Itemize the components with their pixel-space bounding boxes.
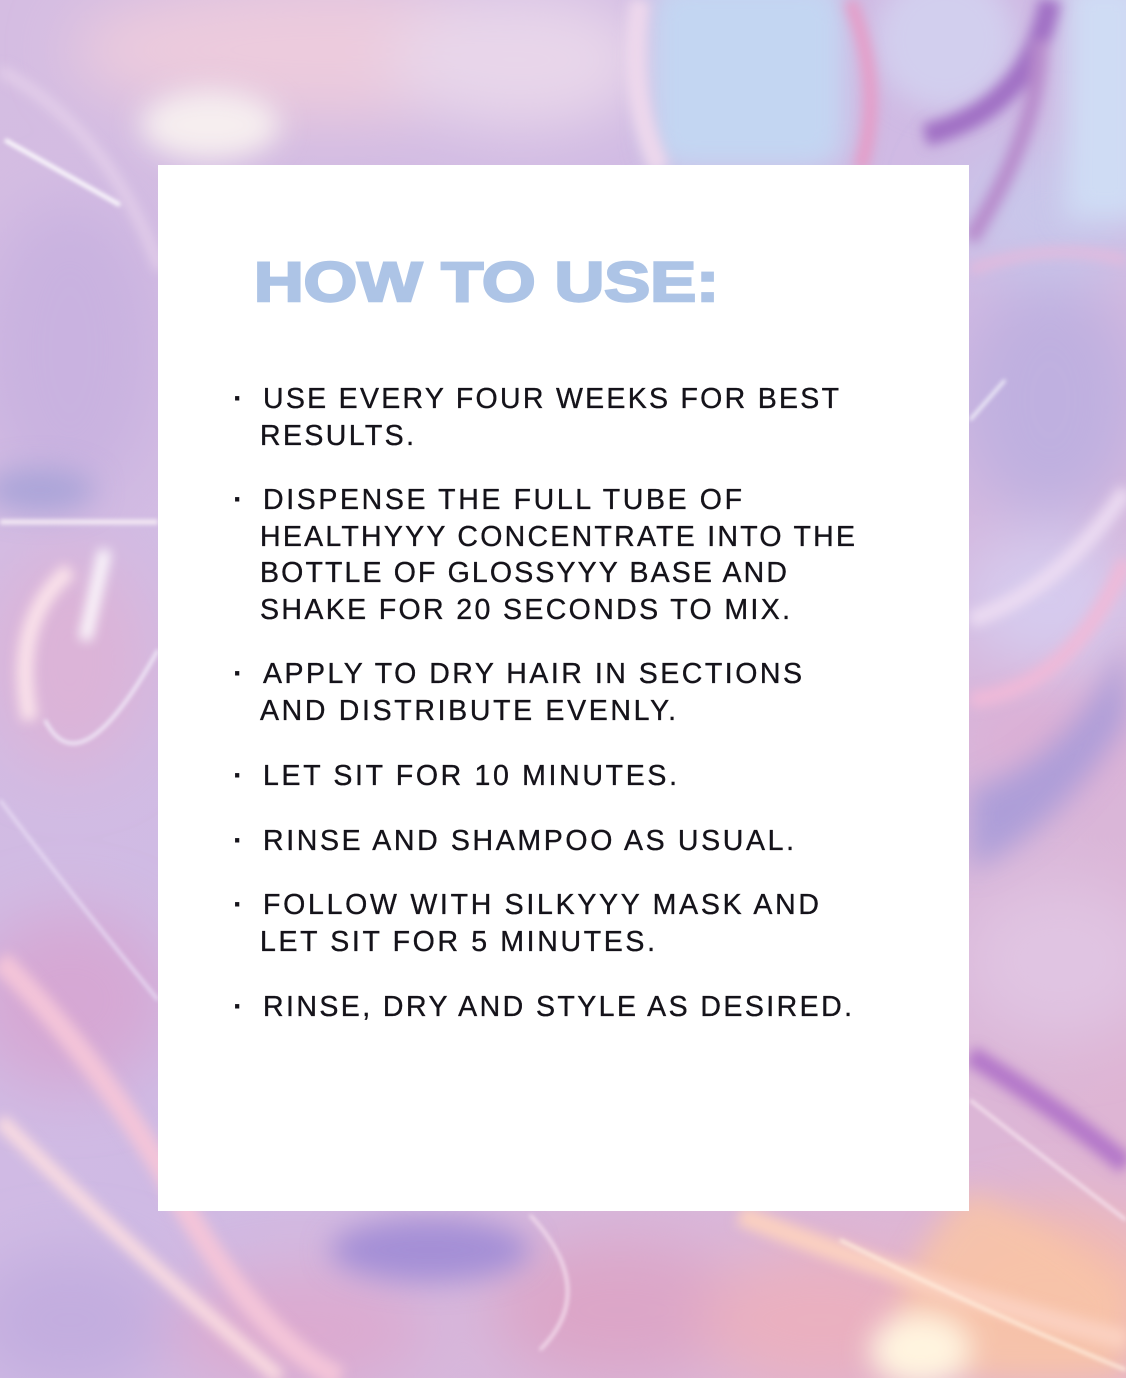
step 2: · (233, 483, 243, 516)
step 1: · (233, 382, 243, 415)
step 2 (233, 483, 855, 626)
step 4: LET SIT FOR 10 MINUTES. (263, 760, 677, 792)
step 6 (233, 888, 819, 958)
step 1: USE EVERY FOUR WEEKS FOR BEST (263, 383, 839, 415)
step 7: RINSE, DRY AND STYLE AS DESIRED. (263, 991, 852, 1023)
step 3 (233, 657, 802, 727)
title: HOW TO USE: (254, 250, 719, 313)
step 3: · (233, 657, 243, 690)
step 6: · (233, 888, 243, 921)
step 7: · (233, 990, 243, 1023)
step 1 (233, 382, 839, 452)
step 6: LET SIT FOR 5 MINUTES. (260, 926, 655, 958)
step 3: AND DISTRIBUTE EVENLY. (260, 695, 676, 727)
step 3: APPLY TO DRY HAIR IN SECTIONS (263, 658, 802, 690)
step 5: RINSE AND SHAMPOO AS USUAL. (263, 825, 794, 857)
step 2: HEALTHYYY CONCENTRATE INTO THE (260, 521, 855, 553)
step 2: BOTTLE OF GLOSSYYY BASE AND (260, 557, 787, 589)
step 4: · (233, 759, 243, 792)
step 5: · (233, 824, 243, 857)
step 1: RESULTS. (260, 420, 414, 452)
step 2: DISPENSE THE FULL TUBE OF (263, 484, 742, 516)
step 2: SHAKE FOR 20 SECONDS TO MIX. (260, 594, 790, 626)
step 6: FOLLOW WITH SILKYYY MASK AND (263, 889, 819, 921)
